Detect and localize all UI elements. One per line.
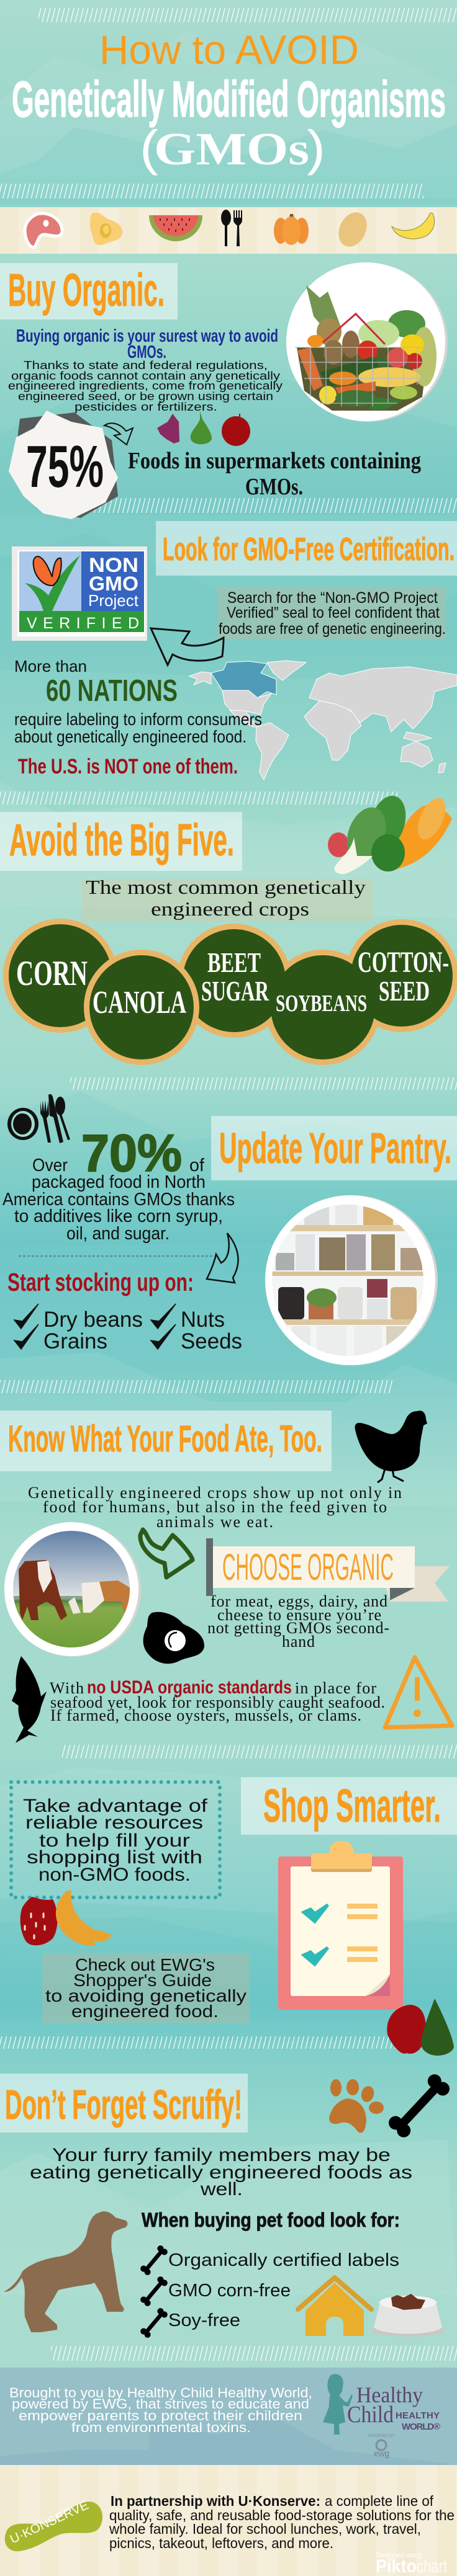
checklist: pet food: GMO corn-free <box>168 2281 291 2301</box>
chart: five crops circles <box>3 919 457 1065</box>
title: How to AVOID <box>99 27 359 73</box>
panel: big five heading: Avoid the Big Five. <box>9 816 234 865</box>
text block: dotted resources box: non-GMO foods. <box>38 1865 191 1885</box>
text block: for meat: not getting GMOs second- <box>207 1619 389 1637</box>
text block: stocking list: Start stocking up on: <box>7 1268 194 1296</box>
text block: 60 nations: 60 NATIONS <box>46 674 178 708</box>
text block: seafood: seafood yet, look for responsibly caught seafood. <box>50 1693 385 1711</box>
text block: dotted resources box: Take advantage of <box>23 1796 208 1816</box>
icon: arrow to logo <box>151 628 224 665</box>
text block: 60 nations: about genetically engineered food. <box>14 727 247 746</box>
icon: hen <box>355 1411 427 1482</box>
panel: check out EWG: to avoiding genetically <box>45 1986 247 2005</box>
logo: non-GMO project verified: Project <box>88 591 139 610</box>
illustration: vegetables <box>328 791 452 874</box>
panel: buy organic heading: Buy Organic. <box>8 264 165 316</box>
text block: search for seal: Search for the “Non-GMO Project <box>227 589 438 607</box>
logo: healthy child healthy world: HEALTHY <box>396 2410 440 2421</box>
panel: big five heading <box>0 812 242 871</box>
text block: dotted resources box: to help fill your <box>39 1830 190 1851</box>
watermark: piktochart <box>376 2551 447 2576</box>
map: world <box>189 661 457 780</box>
text block: foods in supermarkets: GMOs. <box>245 474 303 500</box>
panel: healthy child footer <box>0 2368 457 2465</box>
icon: grapes <box>157 414 179 443</box>
text block: feed <box>28 1484 402 1531</box>
panel: scruffy heading: Don’t Forget Scruffy! <box>5 2082 242 2128</box>
text block: stocking list <box>7 1256 242 1353</box>
chart: five crops circles: SOYBEANS <box>276 991 367 1017</box>
logo: healthy child healthy world: ewg <box>374 2448 389 2458</box>
text block: dotted resources box: shopping list with <box>27 1847 202 1868</box>
text block: 60 nations <box>14 657 262 778</box>
panel: certification heading <box>156 521 457 576</box>
text block: buying organic: engineered ingredients, come from genetically <box>8 380 283 392</box>
logo: non-GMO project verified <box>12 546 147 641</box>
text block: for meat: for meat, eggs, dairy, and <box>210 1592 387 1610</box>
text block: dotted resources box: reliable resources <box>25 1812 203 1833</box>
text block: 60 nations: More than <box>14 657 87 675</box>
text block: furry family: eating genetically engineered foods as <box>30 2162 412 2183</box>
photo: pantry jars <box>265 1195 438 1365</box>
panel: u-konserve footer: whole family. Ideal for school lunches, work, travel, <box>109 2521 421 2537</box>
chart: five crops circles: CORN <box>16 954 88 993</box>
text block: feed: animals we eat. <box>156 1513 273 1531</box>
text block: buying organic: GMOs. <box>127 342 166 362</box>
checklist: pet food: Organically certified labels <box>168 2250 399 2270</box>
checklist: pet food <box>139 2209 400 2339</box>
logo: non-GMO project verified: NON <box>89 554 138 576</box>
icon: plate and cutlery <box>7 1094 70 1143</box>
text block: 70 percent: America contains GMOs thanks <box>2 1190 235 1210</box>
panel: healthy child footer: powered by EWG, that strives to educate and <box>12 2396 309 2412</box>
panel: healthy child footer: empower parents to protect their children <box>19 2408 302 2423</box>
icon: fried egg <box>90 212 122 245</box>
panel: scruffy heading <box>0 2074 248 2133</box>
logo: healthy child healthy world: Child <box>347 2402 394 2428</box>
text block: feed: Genetically engineered crops show up not only in <box>28 1484 402 1502</box>
text block: buying organic: Thanks to state and federal regulations, <box>24 359 268 372</box>
text block: feed: food for humans, but also in the feed given to <box>43 1498 387 1516</box>
text block: dotted resources box <box>11 1782 220 1897</box>
text block: furry family <box>30 2145 412 2199</box>
text block: buying organic: organic foods cannot contain any genetically <box>11 370 280 382</box>
logo: healthy child healthy world: Healthy <box>356 2382 423 2407</box>
icon: banana bunch <box>56 1891 111 1946</box>
icon: arrow to stocking list <box>207 1233 238 1283</box>
text block: buying organic <box>8 326 283 413</box>
icon: warning triangle <box>385 1657 452 1727</box>
chart: five crops circles: SUGAR <box>201 975 269 1007</box>
panel: check out EWG: Check out EWG's <box>75 1955 215 1974</box>
text block: foods in supermarkets <box>128 448 421 500</box>
text block: seafood: If farmed, choose oysters, mussels, or clams. <box>50 1706 361 1724</box>
panel: u-konserve footer: In partnership with U·Konserve: <box>111 2493 320 2509</box>
title: GMOs <box>154 124 309 175</box>
chart: five crops circles: CANOLA <box>93 985 186 1020</box>
text block: 70 percent: oil, and sugar. <box>66 1224 170 1244</box>
text block: common crops: engineered crops <box>151 898 309 920</box>
text block: stocking list: Seeds <box>181 1329 242 1353</box>
text block: 70 percent: 70% <box>81 1124 182 1182</box>
icon: paw <box>329 2079 384 2133</box>
icon: green arrow <box>140 1530 192 1577</box>
photo: vegetable basket <box>286 262 448 422</box>
text block: search for seal <box>217 587 446 640</box>
panel: healthy child footer: Brought to you by Healthy Child Healthy World, <box>9 2385 312 2400</box>
text block: furry family: well. <box>200 2179 243 2199</box>
icon: bone <box>386 2072 453 2140</box>
badge: 75% <box>9 411 118 519</box>
watermark: piktochart: Designed using <box>376 2551 422 2559</box>
logo: u-konserve: U·KONSERVE <box>8 2498 91 2547</box>
text block: buying organic: engineered seed, or be grown using certain <box>18 390 273 403</box>
icon: dog house <box>298 2278 371 2336</box>
checklist: pet food: Soy-free <box>168 2311 240 2330</box>
icon: pet bowl <box>371 2294 445 2337</box>
icon: clipboard <box>278 1841 403 2010</box>
icon: black egg <box>143 1612 204 1664</box>
chart: five crops circles: BEET <box>207 947 261 978</box>
text block: search for seal: Verified” seal to feel confident that <box>227 604 440 622</box>
chart: five crops circles: SEED <box>379 975 430 1007</box>
icon: curved arrow <box>104 423 133 445</box>
icon: steak <box>25 213 62 247</box>
text block: 60 nations: The U.S. is NOT one of them. <box>18 755 238 778</box>
icon: pear <box>191 411 212 444</box>
logo: non-GMO project verified: GMO <box>89 573 138 595</box>
text block: seafood: in place for <box>295 1679 376 1697</box>
icon: apple and pear <box>387 1999 454 2056</box>
icon: strawberry <box>20 1897 57 1945</box>
text block: for meat: hand <box>282 1633 315 1651</box>
panel: buy organic heading <box>0 263 178 319</box>
panel: u-konserve footer <box>0 2465 457 2576</box>
icon: spoon and fork <box>221 210 242 246</box>
text block: 70 percent: Over <box>32 1156 68 1175</box>
banner: choose organic <box>206 1538 450 1602</box>
panel: check out EWG: engineered food. <box>71 2002 219 2021</box>
panel: healthy child footer: from environmental toxins. <box>71 2420 251 2435</box>
food icon band <box>0 207 457 254</box>
badge: 75%: 75% <box>26 434 104 500</box>
title: ) <box>307 120 325 176</box>
panel: u-konserve footer: picnics, takeout, leftovers, and more. <box>109 2535 333 2551</box>
text block: 70 percent: to additives like corn syrup, <box>14 1206 223 1226</box>
icon: watermelon <box>149 215 202 241</box>
text block: common crops <box>81 876 373 922</box>
panel: u-konserve footer: a complete line of <box>325 2493 434 2509</box>
text block: seafood <box>50 1677 385 1724</box>
illustration: dog <box>4 2211 127 2332</box>
text block: stocking list: Nuts <box>181 1308 225 1332</box>
text block: 60 nations: require labeling to inform consumers <box>14 710 262 729</box>
text block: 70 percent: of <box>189 1156 205 1175</box>
photo: cows <box>4 1522 141 1657</box>
text block: seafood: no USDA organic standards <box>87 1677 292 1698</box>
panel: know your food heading <box>0 1411 332 1471</box>
logo: healthy child healthy world: WORLD® <box>402 2422 440 2432</box>
logo: healthy child healthy world <box>323 2374 440 2458</box>
checklist: pet food: When buying pet food look for: <box>142 2209 400 2231</box>
panel: check out EWG: Shopper's Guide <box>73 1971 212 1990</box>
icon: apple <box>222 414 250 446</box>
text block: 70 percent <box>2 1124 235 1244</box>
text block: common crops: The most common genetically <box>86 876 366 898</box>
panel: u-konserve footer: quality, safe, and reusable food-storage solutions for the <box>109 2507 455 2523</box>
icon: fish <box>12 1656 47 1743</box>
text block: furry family: Your furry family members may be <box>52 2145 391 2165</box>
logo: healthy child healthy world: POWERED BY <box>368 2434 395 2438</box>
text block: seafood: With <box>50 1679 84 1697</box>
title <box>12 27 446 176</box>
text block: stocking list: Dry beans <box>43 1308 143 1332</box>
icon: banana <box>392 213 434 239</box>
icon: pumpkin <box>274 214 309 245</box>
text block: 70 percent: packaged food in North <box>32 1172 206 1192</box>
text block: stocking list: Grains <box>43 1329 107 1353</box>
icon: potato <box>333 208 372 251</box>
logo: non-GMO project verified: VERIFIED <box>27 615 139 632</box>
title: ( <box>140 120 158 176</box>
text block: for meat: cheese to ensure you’re <box>217 1606 381 1624</box>
text block: buying organic: pesticides or fertilizers. <box>75 401 217 413</box>
text block: buying organic: Buying organic is your surest way to avoid <box>16 326 278 346</box>
panel: check out EWG <box>42 1953 249 2023</box>
text block: for meat <box>207 1592 389 1651</box>
